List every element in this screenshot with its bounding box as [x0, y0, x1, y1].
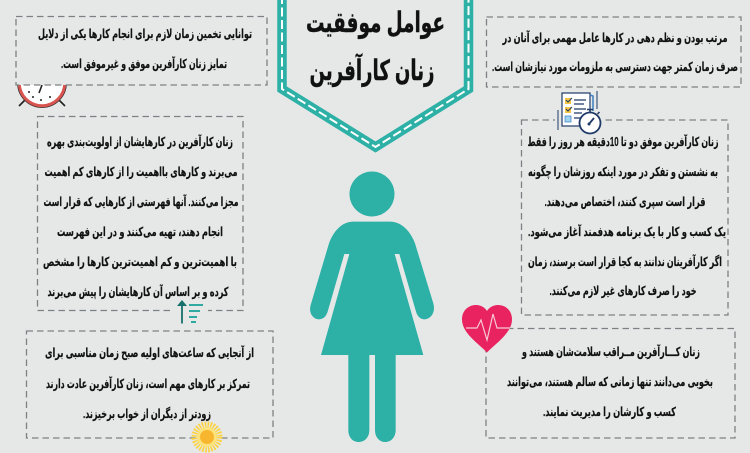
icon: alarm clock	[18, 58, 66, 108]
panel: estimating time	[16, 16, 267, 85]
title text	[306, 7, 445, 87]
panel: prioritizing	[38, 116, 243, 310]
panel: health: کسب و کارشان را مدیریت نمایند.	[543, 405, 676, 419]
panel: early rising: تمرکز بر کارهای مهم است، زنان کارآفرین عادت دارند	[46, 376, 250, 391]
panel: estimating time: توانایی تخمین زمان لازم برای انجام کارها یکی از دلایل	[38, 27, 252, 42]
icon: checklist and stopwatch	[555, 91, 603, 134]
panel: prioritizing: انجام دهند، تهیه می‌کنند و در این فهرست	[57, 225, 223, 240]
figure: woman	[310, 172, 434, 442]
title text: زنان کارآفرین	[310, 53, 434, 87]
panel: prioritizing: مجزا می‌کنند. آنها فهرستی از کارهایی که قرار است	[44, 194, 238, 209]
panel: estimating time: تمایز زنان کارآفرین موفق و غیرموفق است.	[61, 56, 227, 71]
panel: health	[486, 328, 735, 438]
icon: priority arrow	[172, 300, 208, 324]
panel: early rising	[26, 331, 273, 438]
panel: prioritizing: کرده و بر اساس آن کارهایشان را پیش می‌برند	[48, 284, 229, 299]
panel: prioritizing: می‌برند و کارهای بااهمیت را از کارهای کم اهمیت	[44, 165, 238, 179]
panel: daily planning	[522, 120, 728, 315]
icon: heart with pulse	[462, 305, 512, 352]
panel: prioritizing: با اهمیت‌ترین و کم اهمیت‌ترین کارها را مشخص	[43, 255, 237, 269]
title banner	[282, 0, 468, 147]
panel: early rising: از آنجایی که ساعت‌های اولیه صبح زمان مناسبی برای	[45, 345, 254, 360]
panel: early rising: زودتر از دیگران از خواب برخیزند.	[83, 406, 211, 421]
icon: sun	[195, 425, 219, 449]
panel: being organized	[486, 17, 741, 87]
panel: prioritizing: زنان کارآفرین در کارهایشان از اولویت‌بندی بهره	[47, 134, 233, 149]
title text: عوامل موفقیت	[306, 7, 445, 39]
